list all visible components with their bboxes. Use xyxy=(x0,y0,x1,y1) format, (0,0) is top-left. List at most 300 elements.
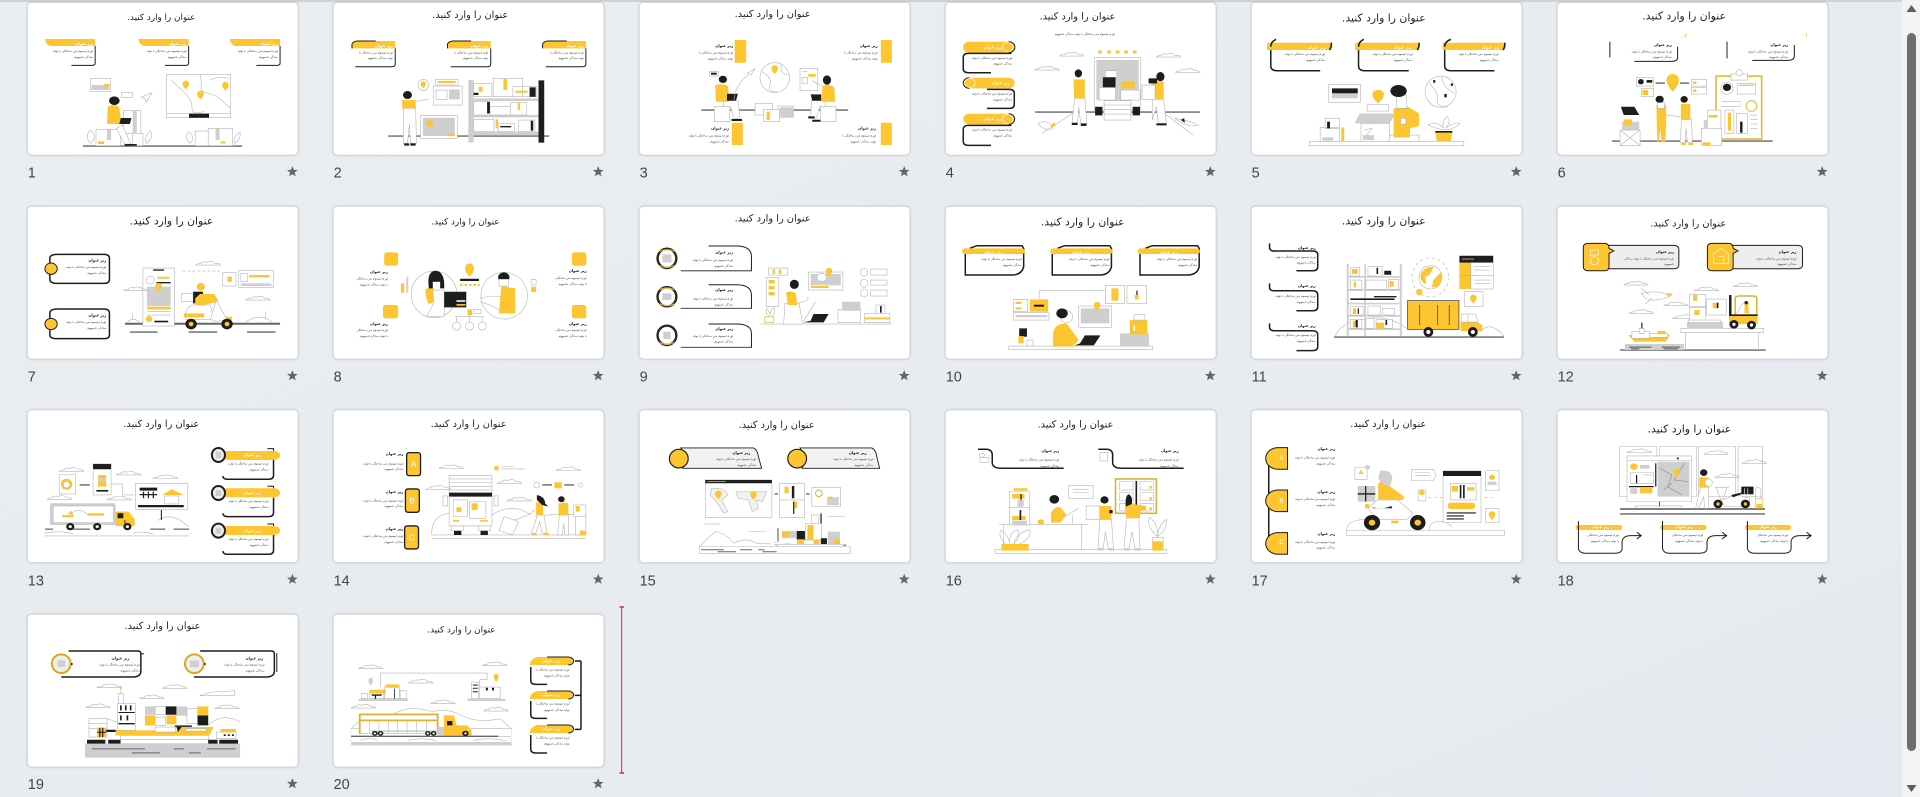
favourite star xyxy=(287,778,298,788)
slide number: 8 xyxy=(334,370,342,386)
slide number: 15 xyxy=(640,573,656,589)
card text: تولید سادگی نامفهوم. xyxy=(558,56,584,61)
card text: زیر عنوان xyxy=(1656,250,1674,254)
card text: لورم ایپسوم متن ساختگی با تولید xyxy=(693,334,733,339)
info boxes and illustration xyxy=(352,41,586,146)
favourite star xyxy=(1817,370,1828,380)
card text: زیر عنوان xyxy=(711,127,729,131)
favourite star xyxy=(287,370,298,380)
card text: لورم ایپسوم متن ساختگی با تولید xyxy=(363,461,404,466)
title: عنوان را وارد کنید. xyxy=(735,9,811,20)
slide card xyxy=(1252,207,1522,359)
pills and illustration xyxy=(45,448,280,554)
card text: سادگی نامفهوم. xyxy=(87,326,107,331)
slide number: 16 xyxy=(946,573,962,589)
slide 20 xyxy=(334,615,604,793)
card text: زیر عنوان xyxy=(1161,449,1179,453)
favourite star xyxy=(1205,166,1216,176)
card text: تولید سادگی نامفهوم. xyxy=(367,56,393,61)
slide number: 20 xyxy=(334,777,350,793)
card text: سادگی نامفهوم. xyxy=(1296,300,1316,305)
card text: زیر عنوان xyxy=(983,46,1001,50)
card text: زیر عنوان xyxy=(1759,525,1777,529)
slide card xyxy=(28,615,298,767)
slide 19 xyxy=(28,615,298,793)
title: عنوان را وارد کنید. xyxy=(1650,219,1726,230)
title: عنوان را وارد کنید. xyxy=(1642,10,1726,23)
slide number: 1 xyxy=(28,166,36,182)
card text: زیر عنوان xyxy=(1160,251,1178,255)
card text: تولید سادگی نامفهوم. xyxy=(850,139,876,144)
slide 1 xyxy=(28,3,298,182)
title: عنوان را وارد کنید. xyxy=(130,215,213,228)
card text xyxy=(1624,250,1797,267)
card text xyxy=(693,251,734,345)
card text: با تولید سادگی نامفهوم. xyxy=(359,334,388,339)
card text: لورم ایپسوم متن ساختگی با تولید xyxy=(1069,257,1110,262)
title: عنوان را وارد کنید. xyxy=(1040,12,1115,23)
step numbers xyxy=(1680,31,1808,41)
badge letters xyxy=(1279,456,1284,546)
card text: لورم ایپسوم متن ساختگی با تولید xyxy=(1632,49,1672,54)
card text: زیر عنوان xyxy=(542,693,560,697)
favourite star xyxy=(1817,574,1828,584)
card text: زیر عنوان xyxy=(1308,46,1326,50)
title: عنوان را وارد کنید. xyxy=(431,419,507,430)
favourite star xyxy=(899,574,910,584)
card text: لورم ایپسوم متن ساختگی با xyxy=(550,51,584,56)
slide number: 18 xyxy=(1558,573,1574,589)
favourite star xyxy=(1817,166,1828,176)
card text: لورم ایپسوم متن ساختگی xyxy=(357,328,388,333)
illustration and arrows xyxy=(1576,447,1811,553)
card text: زیر عنوان xyxy=(1072,251,1090,255)
card text: سادگی نامفهوم. xyxy=(1393,58,1413,63)
favourite star xyxy=(593,574,604,584)
slide 10 xyxy=(946,207,1216,386)
card text: زیر عنوان xyxy=(566,44,584,48)
step numbers: ۰۲ xyxy=(1680,33,1688,41)
card text: سادگی نامفهوم. xyxy=(249,467,269,472)
slide 4 xyxy=(946,3,1216,182)
card text: زیر عنوان xyxy=(470,44,488,48)
card text: لورم ایپسوم متن ساختگی xyxy=(555,276,587,281)
card text: لورم ایپسوم متن ساختگی با تولید xyxy=(53,49,93,54)
card text: لورم ایپسوم متن ساختگی با تولید xyxy=(1295,455,1335,460)
card text: لورم ایپسوم متن ساختگی با تولید xyxy=(981,257,1022,262)
card text: لورم ایپسوم متن ساختگی با تولید xyxy=(1372,52,1413,57)
tab letters xyxy=(409,459,417,542)
tab letters: C xyxy=(409,532,415,542)
title: عنوان را وارد کنید. xyxy=(1350,419,1426,430)
step numbers: ۰۱ xyxy=(1801,31,1808,39)
card text: لورم ایپسوم متن ساختگی با تولید xyxy=(833,457,874,462)
pills and illustration xyxy=(351,657,581,753)
card text: سادگی نامفهوم. xyxy=(384,504,404,509)
favourite star xyxy=(1205,370,1216,380)
tabs and illustration xyxy=(405,453,586,549)
card text: لورم ایپسوم متن ساختگی با تولید xyxy=(228,499,269,504)
slide number: 7 xyxy=(28,370,36,386)
card text: زیر عنوان xyxy=(169,42,187,46)
card text: سادگی نامفهوم. xyxy=(1479,58,1499,63)
card text: زیر عنوان xyxy=(88,314,106,318)
card text: لورم ایپسوم متن ساختگی با تولید xyxy=(972,128,1012,133)
title: عنوان را وارد کنید. xyxy=(1038,419,1113,430)
slide card xyxy=(1558,410,1828,562)
slide number: 12 xyxy=(1558,370,1574,386)
card text: لورم ایپسوم متن ساختگی با تولید xyxy=(689,133,729,138)
slide card xyxy=(28,3,298,155)
slide number: 5 xyxy=(1252,166,1260,182)
card text: زیر عنوان xyxy=(860,44,878,48)
card text: زیر عنوان xyxy=(1675,525,1693,529)
card text: زیر عنوان xyxy=(715,288,733,292)
slide card xyxy=(1558,207,1828,359)
card text: سادگی نامفهوم. xyxy=(1777,262,1797,267)
card text: زیر عنوان xyxy=(1298,324,1316,328)
card text: زیر عنوان xyxy=(732,451,750,455)
slide card xyxy=(946,207,1216,359)
slide 16 xyxy=(946,410,1216,589)
card text: سادگی نامفهوم. xyxy=(384,540,404,545)
card text xyxy=(1275,246,1316,344)
card text: زیر عنوان xyxy=(715,327,733,331)
title: عنوان را وارد کنید. xyxy=(125,621,200,632)
pills and illustration xyxy=(963,42,1200,145)
card text: لورم ایپسوم متن ساختگی با تولید xyxy=(1275,294,1316,299)
badges and illustration xyxy=(658,246,892,347)
slide card xyxy=(334,410,604,562)
card text: سادگی نامفهوم. xyxy=(245,669,265,674)
card text: لورم ایپسوم متن ساختگی با تولید xyxy=(66,320,106,325)
card text xyxy=(1019,449,1179,469)
card text: لورم ایپسوم متن ساختگی با تولید xyxy=(224,663,265,668)
card text xyxy=(66,259,107,331)
boxes and illustration xyxy=(45,254,280,339)
icons and illustration xyxy=(383,252,586,330)
card text: لورم ایپسوم متن ساختگی با xyxy=(536,736,570,741)
slide card xyxy=(946,410,1216,562)
card text: زیر عنوان xyxy=(1394,46,1412,50)
card text: لورم ایپسوم متن ساختگی با تولید xyxy=(972,56,1012,61)
card text xyxy=(363,452,404,545)
title: عنوان را وارد کنید. xyxy=(1041,216,1125,229)
title: عنوان را وارد کنید. xyxy=(427,626,496,636)
slide number: 11 xyxy=(1252,370,1267,386)
card text: زیر عنوان xyxy=(370,270,388,274)
card text: لورم ایپسوم متن ساختگی با xyxy=(842,133,876,138)
slide 5 xyxy=(1252,3,1522,182)
favourite star xyxy=(1511,370,1522,380)
card text: سادگی نامفهوم. xyxy=(714,303,734,308)
card text: لورم ایپسوم متن ساختگی با تولید xyxy=(1285,52,1325,57)
title: عنوان را وارد کنید. xyxy=(1648,422,1731,435)
badge letters: C xyxy=(1279,540,1284,546)
badges and illustration xyxy=(1266,448,1505,554)
slide 2 xyxy=(334,3,604,182)
card text: سادگی نامفهوم. xyxy=(1178,263,1198,268)
card text: تولید سادگی نامفهوم. xyxy=(543,742,570,747)
slide card xyxy=(946,3,1216,155)
card text: لورم ایپسوم متن ساختگی با xyxy=(454,51,488,56)
card text: لورم ایپسوم متن ساختگی با تولید xyxy=(228,461,269,466)
brackets and illustration xyxy=(1270,243,1504,351)
card text: لورم ایپسوم متن ساختگی با تولید xyxy=(238,49,278,54)
slide card xyxy=(640,207,910,359)
card text: سادگی نامفهوم. xyxy=(854,463,874,468)
favourite star xyxy=(899,370,910,380)
title: عنوان را وارد کنید. xyxy=(123,419,199,430)
slide card xyxy=(1252,3,1522,155)
card text: لورم ایپسوم متن ساختگی با تولید xyxy=(1275,255,1316,260)
card text: زیر عنوان xyxy=(386,527,403,531)
info boxes and illustration xyxy=(1267,39,1505,146)
card text: لورم ایپسوم متن ساختگی با تولید xyxy=(1275,333,1316,338)
card text xyxy=(689,44,878,144)
slide card xyxy=(640,3,910,155)
card text xyxy=(981,251,1198,268)
card text: زیر عنوان xyxy=(243,529,261,533)
card text xyxy=(53,42,279,60)
card text: زیر عنوان xyxy=(1317,532,1335,536)
card text: زیر عنوان xyxy=(992,81,1009,85)
slide number: 14 xyxy=(334,573,350,589)
card text xyxy=(1295,447,1336,550)
card text: لورم ایپسوم متن ساختگی xyxy=(1588,533,1619,538)
title: عنوان را وارد کنید. xyxy=(1342,215,1426,228)
card text: زیر عنوان xyxy=(715,44,733,48)
card text: نامفهوم. xyxy=(1664,262,1674,267)
card text: لورم ایپسوم متن ساختگی با تولید xyxy=(99,663,140,668)
card text: سادگی نامفهوم. xyxy=(1316,545,1336,550)
info boxes and illustration xyxy=(45,39,280,146)
slide card xyxy=(28,410,298,562)
title: عنوان را وارد کنید. xyxy=(431,218,500,228)
tab letters: A xyxy=(411,459,417,469)
card text: لورم ایپسوم متن ساختگی با تولید xyxy=(693,297,733,302)
title: عنوان را وارد کنید. xyxy=(1342,12,1426,25)
card text xyxy=(357,269,587,339)
card text: زیر عنوان xyxy=(260,42,278,46)
card text: لورم ایپسوم متن ساختگی با تولید xyxy=(1748,49,1788,54)
card text: زیر عنوان xyxy=(88,259,106,263)
slide 7 xyxy=(28,207,298,386)
scrollbar xyxy=(1902,0,1920,797)
card text: زیر عنوان xyxy=(370,322,388,326)
card text: لورم ایپسوم متن ساختگی با تولید سادگی xyxy=(1624,257,1674,262)
subtitle: لورم ایپسوم متن ساختگی با تولید سادگی نامفهوم xyxy=(1055,32,1115,37)
favourite star xyxy=(1511,166,1522,176)
card text: با تولید سادگی نامفهوم. xyxy=(359,283,388,288)
card text: سادگی نامفهوم. xyxy=(1316,503,1336,508)
card text: زیر عنوان xyxy=(386,452,403,456)
card text: سادگی نامفهوم. xyxy=(87,271,107,276)
card text: سادگی نامفهوم. xyxy=(1296,261,1316,266)
card text: لورم ایپسوم متن ساختگی xyxy=(1757,533,1788,538)
card text: سادگی نامفهوم. xyxy=(167,55,187,60)
card text: لورم ایپسوم متن ساختگی با تولید xyxy=(1295,497,1335,502)
card text: لورم ایپسوم متن ساختگی با تولید xyxy=(363,534,404,539)
card text: زیر عنوان xyxy=(75,42,93,46)
slide 15 xyxy=(640,410,910,589)
slide 12 xyxy=(1558,207,1828,386)
card text: سادگی نامفهوم. xyxy=(1769,55,1789,60)
card text xyxy=(972,46,1013,139)
card text: سادگی نامفهوم. xyxy=(737,463,757,468)
card text: زیر عنوان xyxy=(1779,250,1796,254)
slide number: 17 xyxy=(1252,573,1268,589)
slide number: 10 xyxy=(946,370,962,386)
card text: زیر عنوان xyxy=(386,490,403,494)
card text: تولید سادگی نامفهوم. xyxy=(852,57,878,62)
favourite star xyxy=(1511,574,1522,584)
card text xyxy=(1285,46,1500,63)
slide 9 xyxy=(640,207,910,386)
card text: تولید سادگی نامفهوم. xyxy=(543,674,570,679)
slide 14 xyxy=(334,410,604,589)
card text xyxy=(99,657,265,674)
card text xyxy=(359,44,584,61)
card text: لورم ایپسوم متن ساختگی با xyxy=(536,668,570,673)
card text: زیر عنوان xyxy=(1482,46,1500,50)
favourite star xyxy=(899,166,910,176)
card text: زیر عنوان xyxy=(569,269,587,273)
card text: لورم ایپسوم متن ساختگی با xyxy=(699,51,733,56)
card text xyxy=(716,451,874,468)
favourite star xyxy=(287,574,298,584)
cards and illustration xyxy=(962,246,1200,349)
card text: سادگی نامفهوم. xyxy=(249,505,269,510)
card text: زیر عنوان xyxy=(849,451,867,455)
card text: لورم ایپسوم متن ساختگی xyxy=(357,277,388,282)
card text: سادگی نامفهوم. xyxy=(1040,464,1060,469)
slide number: 2 xyxy=(334,166,342,182)
card text: لورم ایپسوم متن ساختگی با xyxy=(844,51,878,56)
cylinders and illustration xyxy=(669,448,880,553)
brackets and illustration xyxy=(978,449,1184,553)
card text: لورم ایپسوم متن ساختگی با تولید xyxy=(228,537,269,542)
card text: تولید سادگی نامفهوم. xyxy=(462,56,488,61)
card text: سادگی نامفهوم. xyxy=(993,62,1013,67)
title: عنوان را وارد کنید. xyxy=(735,214,811,225)
card text: زیر عنوان xyxy=(542,659,560,663)
brackets and illustration xyxy=(1610,42,1794,146)
title: عنوان را وارد کنید. xyxy=(127,13,195,23)
card text: لورم ایپسوم متن ساختگی xyxy=(1672,533,1703,538)
callouts and illustration xyxy=(52,651,277,758)
card text: زیر عنوان xyxy=(112,657,129,661)
card text: زیر عنوان xyxy=(1654,43,1672,47)
slide number: 9 xyxy=(640,370,648,386)
slide card xyxy=(1558,3,1828,155)
card text: زیر عنوان xyxy=(1041,449,1059,453)
insertion marker xyxy=(620,607,624,773)
card text: تولید سادگی نامفهوم. xyxy=(543,708,570,713)
card text: زیر عنوان xyxy=(243,491,261,495)
slide card xyxy=(640,410,910,562)
slide 6 xyxy=(1558,3,1828,182)
card text: سادگی نامفهوم. xyxy=(993,134,1013,139)
card text: زیر عنوان xyxy=(243,453,261,457)
tab letters: B xyxy=(410,496,416,506)
ribbon shadow xyxy=(0,0,1902,2)
card text: لورم ایپسوم متن ساختگی با تولید xyxy=(363,498,404,503)
card text: سادگی نامفهوم. xyxy=(1090,263,1110,268)
card text: زیر عنوان xyxy=(1770,43,1788,47)
card text: لورم ایپسوم متن ساختگی با تولید xyxy=(1458,52,1499,57)
slide number: 19 xyxy=(28,777,44,793)
card text: تولید سادگی نامفهوم. xyxy=(707,57,733,62)
card text: سادگی نامفهوم. xyxy=(1652,55,1672,60)
card text: زیر عنوان xyxy=(1317,490,1335,494)
card text: لورم ایپسوم متن ساختگی با xyxy=(359,51,393,56)
card text: زیر عنوان xyxy=(1592,525,1609,529)
card text: زیر عنوان xyxy=(569,322,587,326)
card text: لورم ایپسوم متن ساختگی با تولید xyxy=(1138,457,1179,462)
slide card xyxy=(334,3,604,155)
card text: سادگی نامفهوم. xyxy=(709,139,730,144)
card text: زیر عنوان xyxy=(983,117,1001,121)
card text: سادگی نامفهوم. xyxy=(1306,58,1326,63)
badge letters: B xyxy=(1279,499,1283,505)
card text: لورم ایپسوم متن ساختگی xyxy=(555,328,587,333)
favourite star xyxy=(287,166,298,176)
tabs and illustration xyxy=(701,40,892,145)
card text: لورم ایپسوم متن ساختگی با تولید xyxy=(693,258,733,263)
card text: زیر عنوان xyxy=(245,657,263,661)
slide card xyxy=(334,207,604,359)
slide card xyxy=(1252,410,1522,562)
card text: زیر عنوان xyxy=(375,44,393,48)
card text: با تولید سادگی نامفهوم. xyxy=(558,334,587,339)
card text: لورم ایپسوم متن ساختگی با تولید xyxy=(146,49,187,54)
favourite star xyxy=(1205,574,1216,584)
card text: لورم ایپسوم متن ساختگی با تولید xyxy=(972,92,1012,97)
card text: با تولید سادگی نامفهوم. xyxy=(1590,539,1619,544)
slide number: 13 xyxy=(28,573,44,589)
card text xyxy=(1588,525,1788,544)
card text: با تولید سادگی نامفهوم. xyxy=(1760,539,1788,544)
slide card xyxy=(28,207,298,359)
card text: زیر عنوان xyxy=(984,251,1002,255)
card text: زیر عنوان xyxy=(542,727,560,731)
badge letters: A xyxy=(1279,456,1283,462)
card text xyxy=(228,453,269,548)
card text xyxy=(1632,43,1789,60)
card text: لورم ایپسوم متن ساختگی با تولید xyxy=(1295,540,1335,545)
card text xyxy=(536,659,570,747)
card text: لورم ایپسوم متن ساختگی با تولید xyxy=(1756,257,1797,262)
title: عنوان را وارد کنید. xyxy=(739,420,815,431)
slide number: 6 xyxy=(1558,166,1566,182)
card text: لورم ایپسوم متن ساختگی با xyxy=(536,702,570,707)
slide 18 xyxy=(1558,410,1828,589)
card text: لورم ایپسوم متن ساختگی با تولید xyxy=(1157,257,1197,262)
slide 17 xyxy=(1252,410,1522,589)
card text: لورم ایپسوم متن ساختگی با تولید xyxy=(66,265,106,270)
card text: سادگی نامفهوم. xyxy=(384,467,404,472)
slide number: 3 xyxy=(640,166,648,182)
card text: سادگی نامفهوم. xyxy=(714,264,734,269)
card text: سادگی نامفهوم. xyxy=(258,55,279,60)
card text: سادگی نامفهوم. xyxy=(1159,464,1179,469)
callouts and illustration xyxy=(1583,243,1803,350)
favourite star xyxy=(593,166,604,176)
slide number: 4 xyxy=(946,166,954,182)
slide 11 xyxy=(1252,207,1522,386)
favourite star xyxy=(593,370,604,380)
